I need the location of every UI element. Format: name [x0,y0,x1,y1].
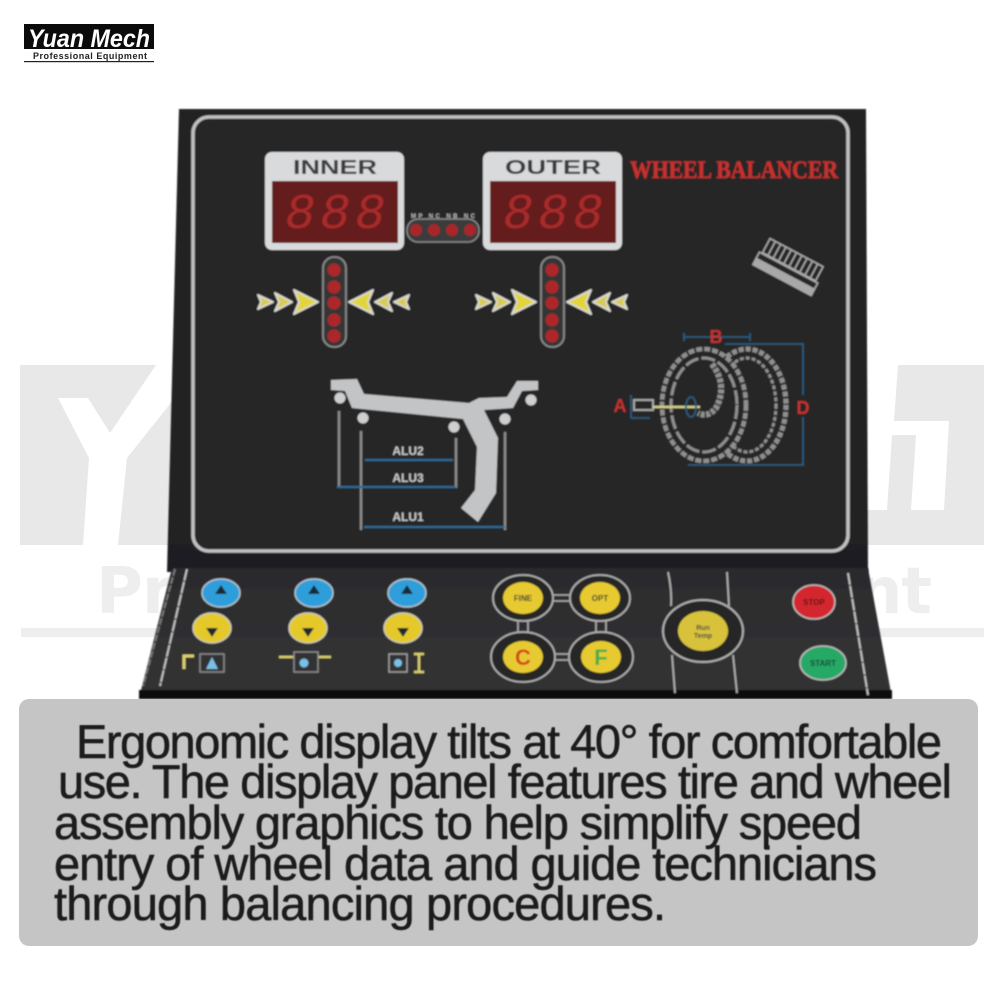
caption panel: entry of wheel data and guide technicians [54,837,877,890]
inner readout: INNER [293,157,378,179]
caption panel: Ergonomic display tilts at 40° for comfortable [76,715,942,768]
diagram: rim profile [331,379,538,530]
start button: Run [696,625,710,632]
diagram: wheel dimensions: A [614,396,626,416]
inner readout: 888 [285,187,385,244]
function button cluster [491,575,633,682]
enter button [800,646,846,680]
caption panel [19,699,978,946]
icon: weight comb [753,237,826,296]
measure icons [184,652,424,672]
diagram: wheel dimensions: D [796,398,810,418]
stop button [793,585,835,619]
caption panel: assembly graphics to help simplify speed [54,796,862,849]
outer readout: OUTER [505,157,602,179]
decorative edge stripes [160,569,868,695]
heading: wheel balancer: WHEEL BALANCER [630,157,839,184]
diagram: rim profile: ALU2 [392,444,424,458]
inner position indicator [258,257,409,347]
function button cluster: FINE [514,594,533,603]
watermark: brand band [20,365,984,545]
outer readout: 888 [503,187,603,244]
diagram: rim profile: ALU3 [392,471,424,485]
caption panel: use. The display panel features tire and wheel [58,755,952,808]
stop button: STOP [803,598,825,607]
yellow down buttons [193,613,422,643]
panel: keypad [139,568,892,699]
button arrow marks [206,585,413,637]
function button cluster: F [594,645,608,670]
logo: Yuan Mech [28,25,150,53]
inner readout [265,152,404,250]
start button: Temp [694,633,712,640]
diagram: rim profile: ALU1 [392,510,424,524]
mode indicator leds [407,214,479,242]
watermark: professional equipment: Professional Equipment [96,555,932,629]
logo [24,24,154,62]
mode indicator leds: MP NC NB NC [411,214,476,220]
logo: Professional Equipment [33,51,147,61]
enter button: START [810,659,836,668]
outer position indicator [476,257,627,347]
caption panel: through balancing procedures. [54,877,666,930]
panel: machine display [167,109,868,572]
diagram: wheel dimensions [614,327,811,465]
function button cluster: C [515,645,531,670]
outer readout [483,152,622,250]
function button cluster: OPT [592,594,608,603]
diagram: wheel dimensions: B [710,327,722,347]
blue up buttons [202,579,426,607]
start button [663,572,743,693]
